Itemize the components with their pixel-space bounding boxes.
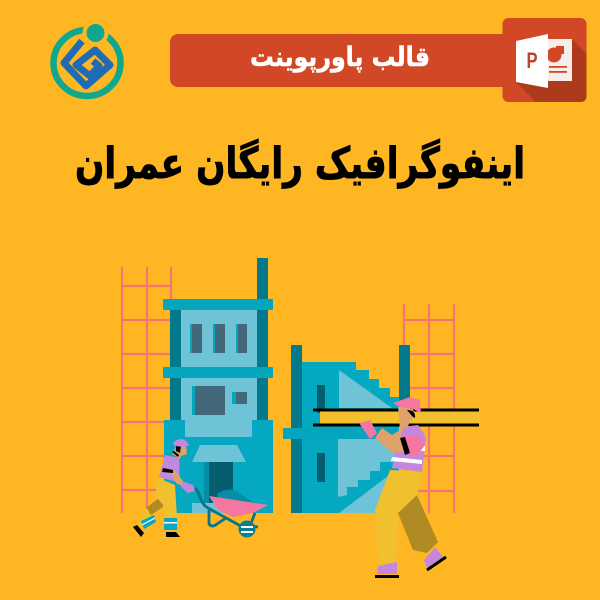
worker carrying boards xyxy=(359,397,446,578)
head xyxy=(393,397,421,430)
icon: PowerPoint: P xyxy=(526,48,538,73)
right building xyxy=(283,345,410,513)
logo xyxy=(54,20,120,96)
shoes xyxy=(375,547,446,578)
banner xyxy=(170,34,510,87)
right scaffolding xyxy=(404,304,454,513)
banner text: قالب پاورپوینت xyxy=(250,42,430,73)
boards xyxy=(313,408,480,426)
wheelbarrow xyxy=(195,488,268,538)
back leg xyxy=(398,495,438,553)
arm xyxy=(162,468,195,493)
roof slab xyxy=(163,299,273,310)
front leg xyxy=(155,478,180,537)
middle slab xyxy=(163,367,273,378)
upper windows xyxy=(190,324,247,353)
back leg xyxy=(133,495,163,537)
lower floor base xyxy=(164,420,273,513)
left scaffolding xyxy=(122,267,171,513)
front leg xyxy=(375,470,422,563)
head xyxy=(172,439,190,459)
worker with wheelbarrow xyxy=(133,439,268,538)
torso xyxy=(391,425,426,472)
left building xyxy=(163,258,273,513)
icon: PowerPoint xyxy=(502,18,586,102)
lower windows xyxy=(192,386,247,415)
door xyxy=(192,445,246,513)
torso xyxy=(159,455,180,483)
illustration: construction scene xyxy=(122,258,480,578)
arm xyxy=(359,420,425,455)
